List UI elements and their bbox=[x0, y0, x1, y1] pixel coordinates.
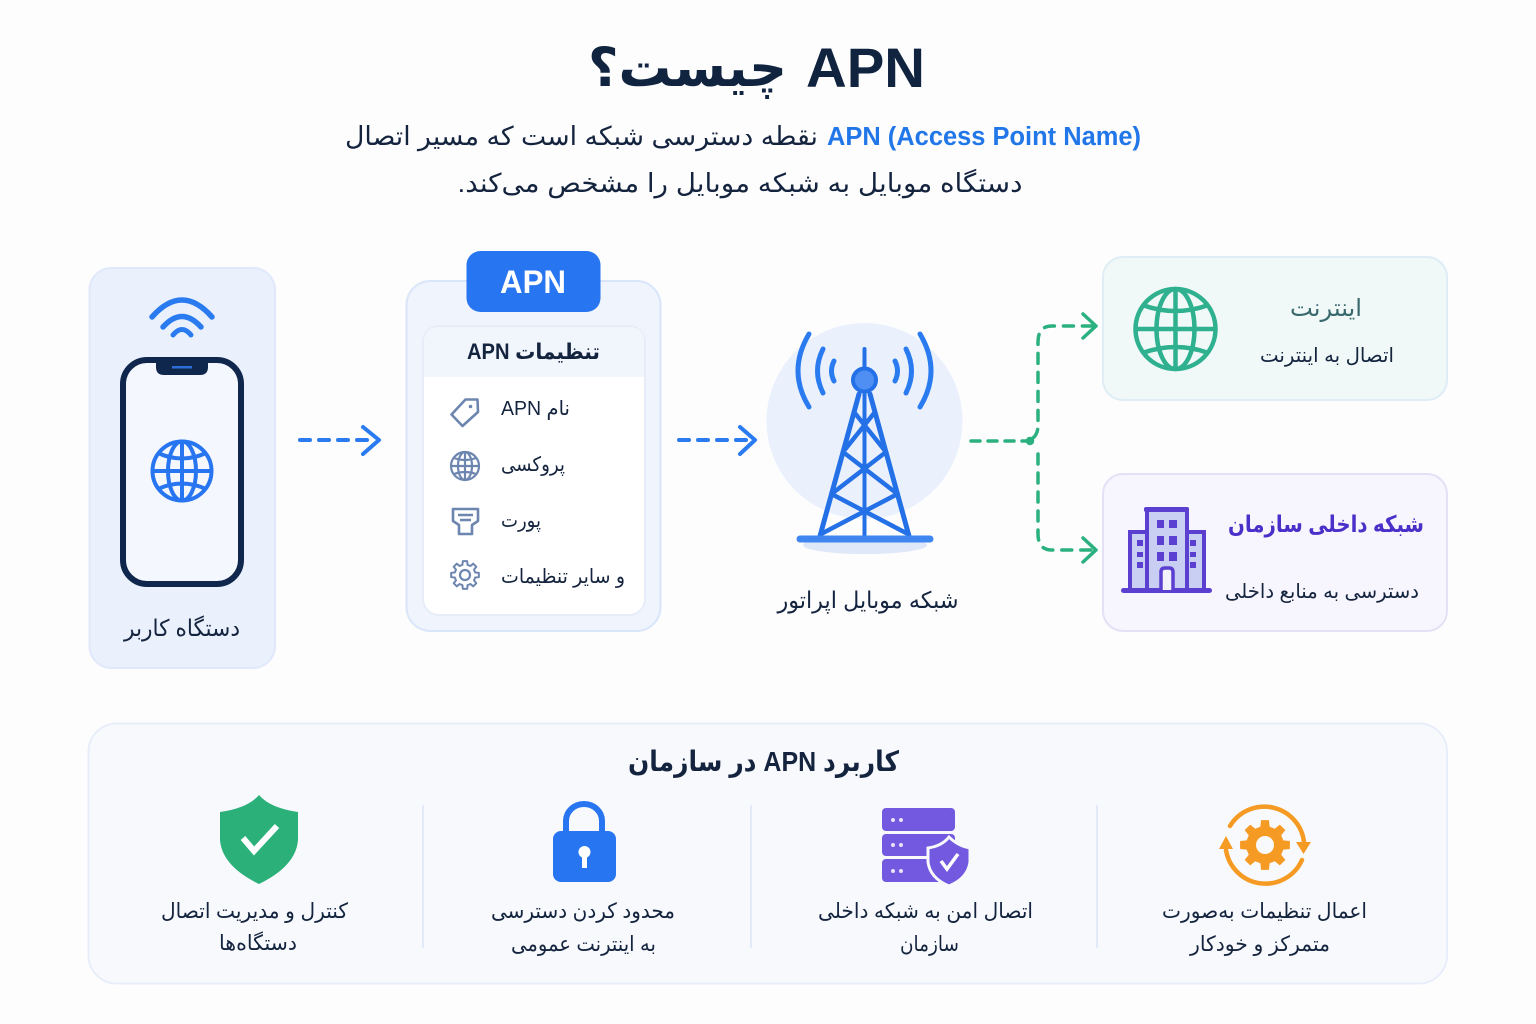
item: device control: کنترل و مدیریت اتصال bbox=[161, 900, 348, 923]
icon: green globe bbox=[1134, 288, 1216, 370]
APN badge bbox=[466, 251, 600, 312]
internal network description: دسترسی به منابع داخلی bbox=[1225, 581, 1419, 603]
panel: internal network bbox=[1103, 474, 1447, 631]
operator label: شبکه موبایل اپراتور bbox=[777, 587, 958, 614]
title bbox=[588, 36, 925, 99]
item: secure internal connection bbox=[818, 808, 1033, 956]
title: APN bbox=[806, 36, 925, 99]
panel: user device bbox=[90, 268, 275, 668]
arrow: branching connector bbox=[971, 314, 1096, 562]
subtitle text block: APN (Access Point Name) bbox=[827, 123, 1141, 151]
row: other settings bbox=[451, 561, 625, 589]
inner settings card bbox=[423, 326, 645, 615]
item: automatic central settings: متمرکز و خودکار bbox=[1189, 933, 1330, 956]
icon: globe bbox=[152, 441, 212, 501]
panel: internet bbox=[1103, 257, 1447, 400]
row: proxy bbox=[451, 452, 565, 480]
title: چیست؟ bbox=[588, 38, 787, 99]
panel: APN settings bbox=[406, 251, 660, 631]
subtitle text block: دستگاه موبایل به شبکه موبایل را مشخص می‌کند. bbox=[458, 168, 1022, 199]
item: secure internal connection: سازمان bbox=[900, 933, 959, 956]
internet description: اتصال به اینترنت bbox=[1260, 345, 1394, 367]
row: proxy: پروکسی bbox=[501, 454, 565, 477]
item: restrict public internet: به اینترنت عمومی bbox=[511, 933, 656, 956]
icon: phone bbox=[123, 358, 241, 584]
arrow: APN to operator bbox=[679, 427, 755, 454]
device label: دستگاه کاربر bbox=[123, 615, 240, 642]
internal network heading: شبکه داخلی سازمان bbox=[1228, 511, 1424, 538]
arrow: device to APN bbox=[300, 427, 379, 454]
icon: building bbox=[1121, 507, 1212, 593]
icon: cell tower bbox=[798, 334, 931, 539]
internet heading: اینترنت bbox=[1290, 295, 1362, 322]
item: automatic central settings: اعمال تنظیمات به‌صورت bbox=[1162, 900, 1367, 923]
settings heading: تنظیمات APN bbox=[467, 339, 600, 364]
item: device control: دستگاه‌ها bbox=[219, 931, 297, 955]
row: APN name: نام APN bbox=[501, 398, 570, 420]
item: device control bbox=[161, 795, 348, 955]
item: secure internal connection: اتصال امن به شبکه داخلی bbox=[818, 900, 1033, 923]
panel: operator tower bbox=[766, 323, 962, 614]
APN badge: APN bbox=[500, 264, 566, 300]
panel heading: کاربرد APN در سازمان bbox=[628, 746, 900, 778]
item: automatic central settings bbox=[1162, 807, 1367, 956]
row: other settings: و سایر تنظیمات bbox=[501, 566, 625, 588]
row: port bbox=[453, 509, 541, 534]
item: restrict public internet bbox=[491, 804, 675, 956]
row: APN name bbox=[452, 398, 570, 426]
panel: uses in organization bbox=[88, 724, 1447, 984]
row: port: پورت bbox=[501, 510, 541, 533]
subtitle text block bbox=[345, 121, 1141, 199]
icon: wifi bbox=[152, 300, 212, 335]
item: restrict public internet: محدود کردن دسترسی bbox=[491, 900, 675, 923]
subtitle text block: نقطه دسترسی شبکه است که مسیر اتصال bbox=[345, 121, 818, 152]
